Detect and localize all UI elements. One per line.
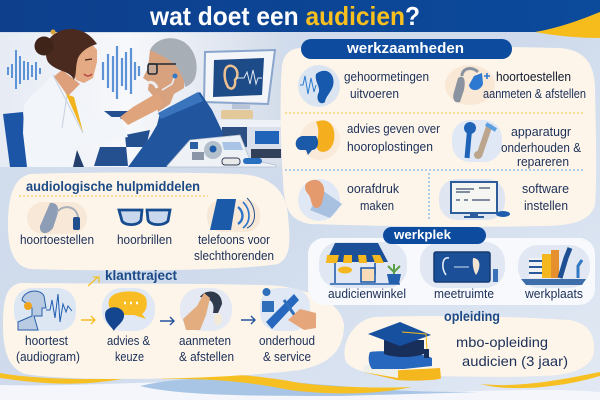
label meetruimte: meetruimte [434,286,494,301]
icon: audicienwinkel [319,242,407,288]
label hoorbrillen: hoorbrillen [117,232,172,247]
panel: klanttraject [3,283,344,379]
icon: oor met geluidsgolf [298,65,340,107]
label advies geven over: advies geven over [347,121,441,136]
icon: werkplaats [518,245,590,288]
panel: werkzaamheden [281,39,596,227]
heading pill: werkplek: werkplek [393,227,452,242]
icon: advies en keuze [102,288,155,331]
label oorafdruk: oorafdruk [347,181,399,196]
heading: klanttraject [88,268,178,286]
label hooroplostingen: hooroplostingen [347,139,433,154]
label gehoormetingen: gehoormetingen [344,69,429,84]
monitor with ear [204,50,275,109]
heading pill: werkzaamheden: werkzaamheden [346,40,464,57]
icon: software monitor [439,179,510,220]
panel: werkplek [308,238,595,305]
label hoortest: hoortest [25,333,68,348]
icon: onderhoud en service [260,288,316,331]
desk with books and cabinet [219,110,285,165]
audicien [23,29,163,167]
icon: hoortoestel [27,202,87,234]
header band [0,0,600,38]
heading: audiologische hulpmiddelen [26,178,200,194]
heading pill: werkplek [383,227,486,244]
icon: hoortoestel aanmeten [445,65,495,105]
icon: oorafdruk [298,179,342,221]
label audicienwinkel: audicienwinkel [328,286,406,301]
desk background [94,111,150,166]
label audiogram: (audiogram) [16,349,80,364]
audiometer device [167,135,276,167]
label keuze: keuze [115,349,144,364]
sound wave left [4,50,40,89]
icon: telefoon met geluidsgolven [207,198,260,232]
illustration: audicien fitting a hearing aid [0,29,285,167]
arrow 3 [241,316,255,324]
panel: audiologische hulpmiddelen [8,172,289,270]
panel: opleiding [344,309,594,381]
label software: software [522,181,569,196]
icon: advies oor en tekstballon [296,120,340,160]
icon: hoortest [14,288,76,331]
patient [128,38,223,167]
label onderhouden: onderhouden & [501,140,581,155]
sound wave right [98,46,139,99]
title: wat doet een audicien? [149,1,420,31]
label mbo-opleiding: mbo-opleiding [456,334,548,350]
label instellen: instellen [524,198,568,213]
label aanmeten: aanmeten [179,333,231,348]
label audicien 3 jaar: audicien (3 jaar) [462,353,568,369]
icon: gereedschap [452,120,502,162]
label apparatugr: apparatugr [511,124,572,139]
label hoortoestellen aanmeten: hoortoestellen [496,69,571,84]
heading pill: werkzaamheden [301,39,512,59]
label uitvoeren: uitvoeren [350,86,399,101]
arrow 1 [81,316,95,324]
icon: meetruimte [420,242,505,288]
label slechthorenden: slechthorenden [194,248,274,263]
label advies: advies & [107,333,150,348]
label repareren: repareren [517,154,569,169]
label service: & service [263,349,311,364]
label maken: maken [360,198,394,213]
label onderhoud: onderhoud [259,333,315,348]
arrow 2 [160,317,174,325]
label hoortoestellen: hoortoestellen [20,232,94,247]
heading: opleiding [444,309,500,324]
heading: klanttraject: klanttraject [105,268,178,283]
label afstellen: & afstellen [179,349,234,364]
icon: aanmeten en afstellen [180,288,232,331]
label werkplaats: werkplaats [524,286,583,301]
icon: diploma hoed op boeken [363,322,441,381]
label telefoons: telefoons voor [198,232,271,247]
icon: hoorbril [119,210,170,225]
chair [3,112,28,167]
bottom wave decoration [0,372,600,400]
